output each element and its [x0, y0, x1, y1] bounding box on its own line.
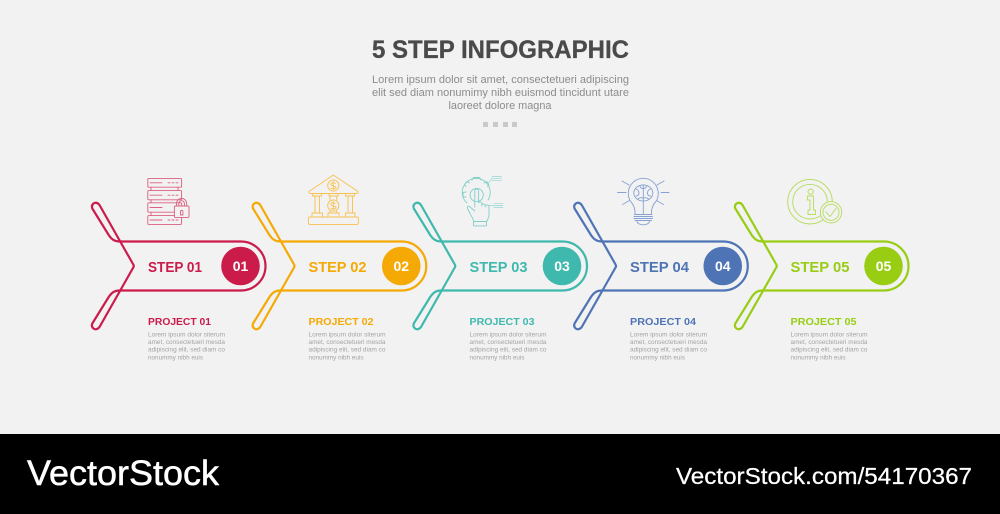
intro text: elit sed diam nonumimy nibh euismod tincidunt utare: [372, 87, 629, 99]
step 3 number badge: 03: [554, 258, 570, 274]
step 1 body text: amet, consectetueri mesda: [148, 339, 225, 346]
step 5 body text: amet, consectetueri mesda: [790, 339, 868, 346]
icon: hand touching gear: [462, 177, 503, 226]
icon: info circle with check: [788, 179, 842, 224]
step 4 project heading: PROJECT 04: [630, 316, 696, 328]
intro text: laoreet dolore magna: [448, 100, 552, 112]
step 5 number badge: 05: [876, 258, 891, 274]
step 2 body text: [308, 332, 386, 362]
icon: light bulb with brain: [618, 178, 669, 225]
step 2 project heading: PROJECT 02: [308, 316, 374, 328]
step 5 body text: adipiscing elit, sed diam co: [790, 346, 868, 354]
step 3 body text: Lorem ipsum dolor siterum: [470, 332, 547, 338]
step 3 arrow: [413, 203, 587, 329]
step 2 panel: [253, 175, 426, 362]
step 5 arrow: [735, 203, 908, 329]
step 1 label: STEP 01: [148, 260, 202, 276]
step 5 panel: [735, 179, 908, 362]
step 4 label: STEP 04: [630, 260, 689, 276]
step 3 number badge: [543, 247, 581, 285]
step 5 label: STEP 05: [790, 260, 850, 276]
step 1 number badge: [221, 247, 260, 285]
step 4 body text: [630, 332, 707, 362]
step 3 body text: amet, consectetueri mesda: [470, 339, 547, 346]
step 4 number badge: [703, 247, 742, 285]
step 1 body text: nonummy nibh euis: [148, 354, 204, 362]
title divider dots: [483, 122, 517, 127]
step 1 body text: Lorem ipsum dolor siterum: [148, 332, 225, 338]
step 2 arrow: [253, 203, 426, 329]
step 5 body text: nonummy nibh euis: [790, 354, 846, 362]
icon: bank with coins: [308, 175, 358, 224]
step 2 label: STEP 02: [308, 260, 366, 276]
step 3 project heading: PROJECT 03: [470, 316, 535, 328]
step 2 body text: adipiscing elit, sed diam co: [308, 346, 386, 354]
step 4 body text: adipiscing elit, sed diam co: [630, 346, 707, 354]
step 3 label: STEP 03: [470, 260, 528, 276]
step 1 project heading: PROJECT 01: [148, 316, 211, 328]
step 4 body text: Lorem ipsum dolor siterum: [630, 332, 707, 338]
intro text: Lorem ipsum dolor sit amet, consectetueri adipiscing: [372, 74, 629, 86]
step 3 body text: [470, 332, 547, 362]
step 3 body text: adipiscing elit, sed diam co: [470, 346, 547, 354]
footer brand: VectorStock: [27, 454, 220, 493]
step 1 number badge: 01: [233, 258, 248, 274]
icon: server with padlock: [148, 178, 189, 224]
step 4 body text: amet, consectetueri mesda: [630, 339, 707, 346]
title: 5 STEP INFOGRAPHIC: [372, 36, 629, 64]
footer image id: VectorStock.com/54170367: [676, 463, 972, 489]
step 4 number badge: 04: [715, 258, 731, 274]
step 5 body text: Lorem ipsum dolor siterum: [790, 332, 868, 338]
step 1 arrow: [92, 203, 265, 329]
step 1 body text: adipiscing elit, sed diam co: [148, 346, 225, 354]
step 4 arrow: [574, 203, 748, 329]
intro text: [372, 74, 629, 112]
step 2 body text: amet, consectetueri mesda: [308, 339, 386, 346]
step 3 panel: [413, 177, 587, 362]
step 2 body text: Lorem ipsum dolor siterum: [308, 332, 386, 338]
step 1 body text: [148, 332, 225, 362]
step 2 body text: nonummy nibh euis: [308, 354, 364, 362]
footer bar: [0, 434, 1000, 514]
step 3 body text: nonummy nibh euis: [470, 354, 525, 362]
step 4 panel: [574, 178, 748, 362]
step 1 panel: [92, 178, 265, 362]
step 5 project heading: PROJECT 05: [790, 316, 857, 328]
step 2 number badge: 02: [393, 258, 409, 274]
step 5 body text: [790, 332, 868, 362]
step 5 number badge: [864, 247, 903, 285]
step 4 body text: nonummy nibh euis: [630, 354, 686, 362]
step 2 number badge: [382, 247, 421, 285]
